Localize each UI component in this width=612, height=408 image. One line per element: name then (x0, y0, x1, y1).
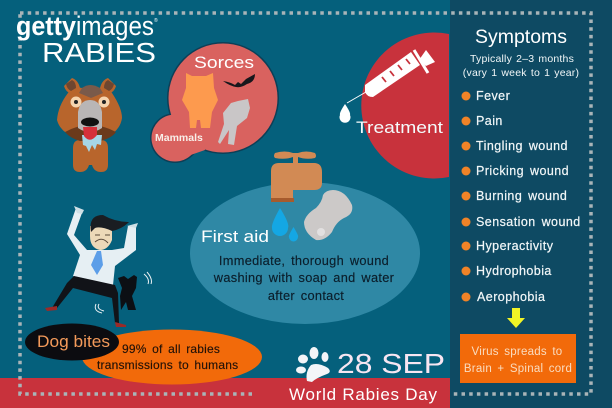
list: symptoms: Hydrophobia (476, 264, 552, 278)
text: incubation period (463, 53, 579, 79)
list: symptoms: Hyperactivity (476, 239, 554, 253)
label: mammals: Mammals (155, 132, 203, 144)
icon: grey mammal (218, 99, 250, 145)
logo: getty images (16, 11, 158, 41)
heading: first aid: First aid (201, 227, 269, 246)
icon: syringe (340, 50, 435, 123)
heading: symptoms: Symptoms (475, 27, 567, 48)
panel: first aid (190, 152, 420, 324)
list: symptoms (462, 89, 581, 304)
label: treatment: Treatment (356, 118, 443, 137)
text: first aid instructions: washing with soap and water (213, 270, 395, 285)
list: symptoms: Fever (476, 89, 510, 103)
text: first aid instructions (213, 253, 395, 303)
list: symptoms: Tingling wound (476, 139, 568, 153)
callout: virus spreads (460, 334, 576, 383)
heading: sources: Sorces (194, 53, 254, 72)
list: symptoms: Pain (476, 114, 503, 128)
panel: treatment circle (361, 33, 449, 179)
icon: water drops (272, 208, 298, 242)
text: transmission statistic (97, 342, 238, 372)
list: symptoms: Burning wound (476, 189, 567, 203)
text: incubation period: Typically 2–3 months (470, 53, 574, 65)
callout: virus spreads: Brain + Spinal cord (464, 363, 572, 375)
text: transmission statistic: transmissions to humans (97, 358, 238, 372)
callout: transmission (25, 324, 262, 384)
text: first aid instructions: Immediate, thorough wound (219, 253, 389, 268)
text: first aid instructions: after contact (268, 288, 344, 303)
text: transmission statistic: 99% of all rabies (122, 342, 220, 356)
icon: rabid dog (57, 78, 122, 172)
bottom red band (0, 378, 450, 408)
badge: dog bites (25, 324, 119, 360)
logo: getty images: images (76, 11, 154, 41)
list: symptoms: Aerophobia (477, 290, 545, 304)
badge: dog bites: Dog bites (37, 332, 110, 351)
logo: getty images: ® (154, 17, 158, 24)
logo: getty images: getty (16, 11, 76, 41)
arrow: to virus spread (507, 308, 525, 328)
figure: man bitten by dog (45, 206, 152, 327)
list: symptoms: Sensation wound (476, 215, 581, 229)
icon: paw print (296, 347, 330, 382)
date: 28 SEP: 28 SEP (337, 348, 445, 379)
icon: black dog (118, 275, 137, 310)
callout: virus spreads: Virus spreads to (472, 346, 562, 358)
panel: sources (150, 42, 279, 163)
icon: soap (304, 190, 352, 240)
text: incubation period: (vary 1 week to 1 year) (463, 67, 579, 79)
label: world rabies day: World Rabies Day (289, 385, 438, 404)
icon: orange mammal (182, 73, 218, 128)
panel: symptoms background (450, 0, 612, 408)
list: symptoms: Pricking wound (476, 164, 569, 178)
icon: bat (223, 74, 255, 87)
title: RABIES (42, 37, 156, 68)
icon: faucet (271, 152, 322, 202)
